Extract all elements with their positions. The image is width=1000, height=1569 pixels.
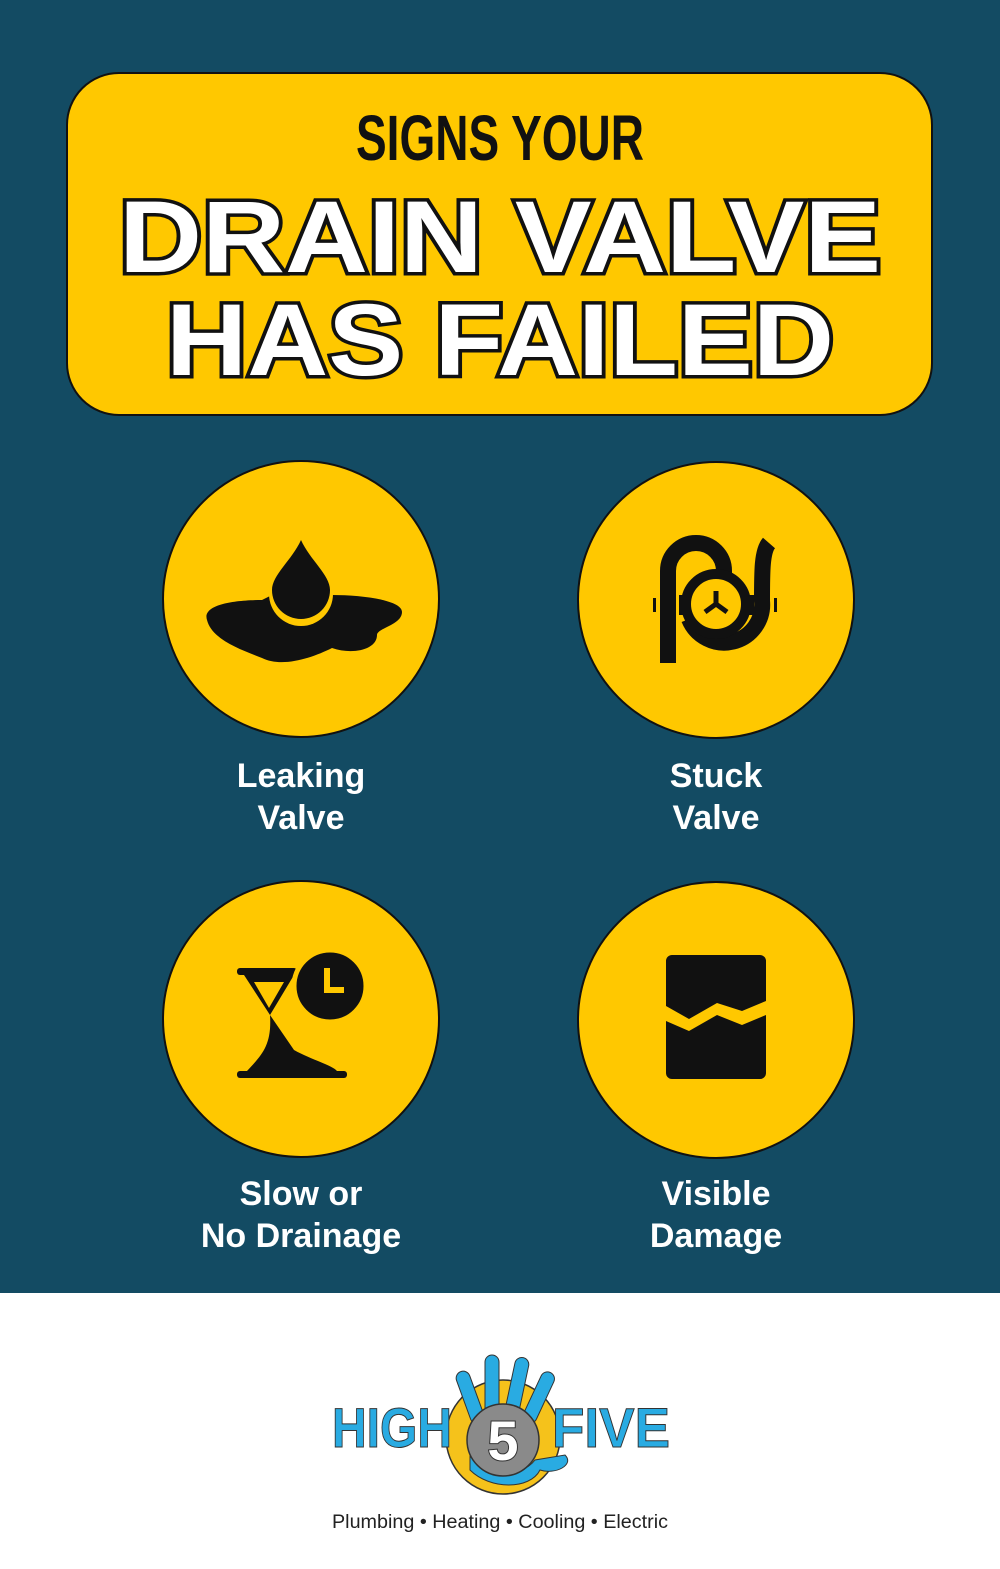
label: stuck valve (670, 757, 762, 837)
label: visible damage (650, 1175, 782, 1255)
label: stuck valve: Stuck (670, 757, 762, 795)
title: drain valve: DRAIN VALVE (119, 180, 881, 294)
logo tagline: Plumbing • Heating • Cooling • Electric (332, 1512, 668, 1533)
icon: leaking valve (162, 460, 440, 738)
label: stuck valve: Valve (672, 799, 759, 837)
logo (332, 1354, 670, 1533)
label: visible damage: Visible (662, 1175, 770, 1213)
label: slow drainage: Slow or (240, 1175, 362, 1213)
logo: 5 (487, 1409, 519, 1472)
label: leaking valve (237, 757, 365, 837)
label: visible damage: Damage (650, 1217, 782, 1255)
icon: stuck valve (577, 461, 855, 739)
label: slow drainage: No Drainage (201, 1217, 401, 1255)
logo: HIGH (332, 1396, 452, 1459)
label: leaking valve: Valve (258, 799, 344, 837)
title: signs your: SIGNS YOUR (356, 102, 644, 174)
label: leaking valve: Leaking (237, 757, 365, 795)
icon: slow drainage (162, 880, 440, 1158)
label: slow drainage (201, 1175, 401, 1255)
icon: visible damage (577, 881, 855, 1159)
logo: FIVE (552, 1396, 670, 1459)
title: has failed: HAS FAILED (166, 283, 834, 397)
